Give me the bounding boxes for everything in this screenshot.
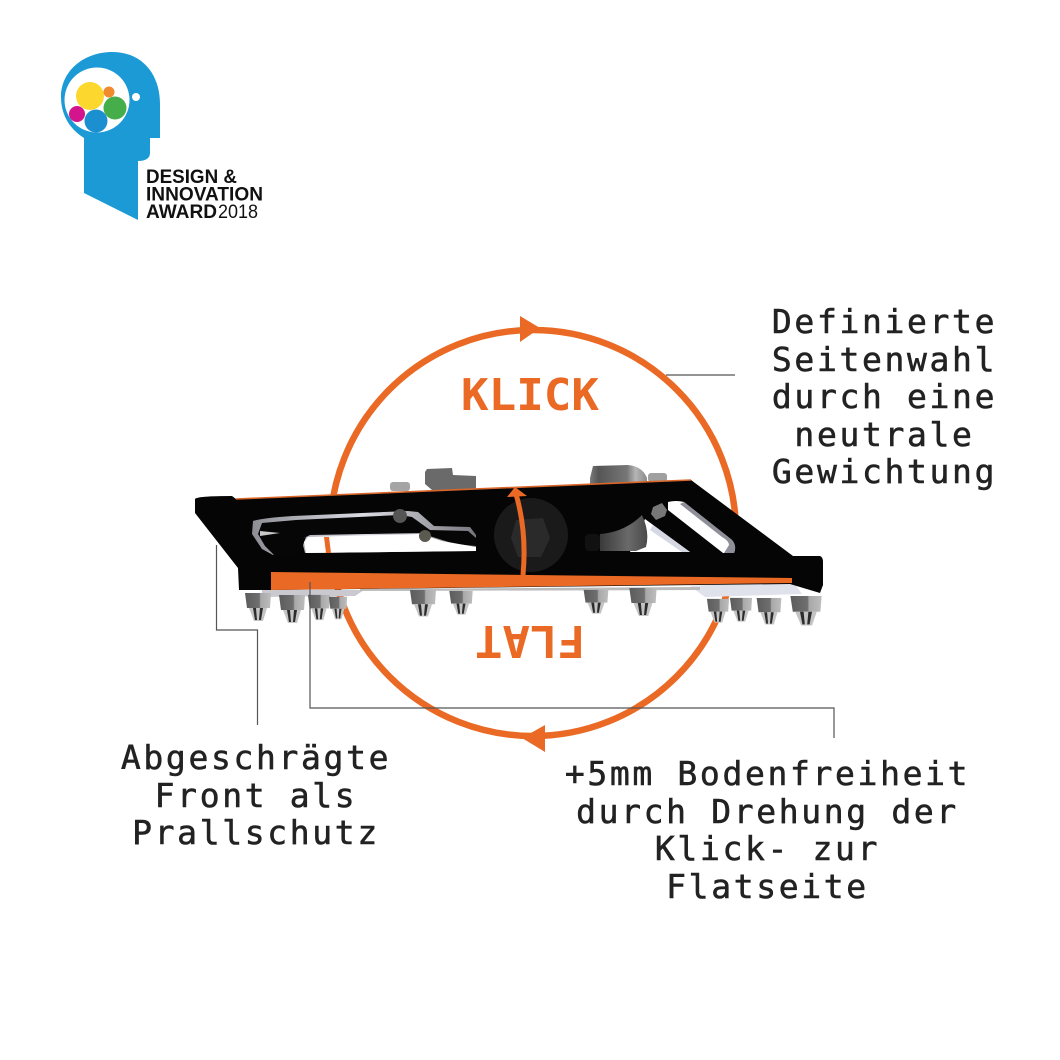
icon: magenta bubble — [69, 106, 85, 122]
leader line: bevelled front — [216, 545, 258, 725]
top screw left — [390, 482, 410, 491]
pedal body — [195, 480, 823, 593]
left window silver frame — [252, 511, 476, 555]
callout: side selection: Gewichtung — [772, 452, 997, 491]
icon: blue head silhouette — [61, 52, 160, 220]
right slot silver edge — [680, 502, 735, 553]
silver underside centre — [360, 587, 700, 591]
arrow: rotation head — [507, 487, 527, 497]
callout: ground clearance: Flatseite — [666, 867, 869, 906]
right slot — [668, 501, 735, 553]
callout: ground clearance: +5mm Bodenfreiheit — [565, 754, 970, 793]
callout: side selection: durch eine — [772, 377, 997, 416]
slot screw upper — [393, 509, 407, 523]
icon: yellow bubble — [76, 82, 104, 110]
arrow: bottom head — [522, 725, 545, 752]
icon: white mind circle — [64, 68, 130, 132]
callout: bevelled front: Prallschutz — [132, 813, 380, 852]
window glint — [260, 531, 280, 536]
top screw right — [648, 473, 667, 482]
silver underside left — [262, 590, 364, 597]
award text: 2018 — [218, 202, 258, 223]
icon: green bubble — [104, 96, 126, 120]
icon: eye — [132, 93, 140, 101]
top hardware: left clip — [425, 468, 476, 490]
orange flat-side bar — [271, 572, 792, 590]
label: FLAT (upside down): FLAT — [475, 615, 585, 666]
axle hex nut — [511, 518, 550, 557]
logo: Design & Innovation Award 2018 — [61, 52, 263, 223]
icon: blue bubble — [84, 110, 108, 132]
rotation circle — [330, 316, 736, 752]
top hardware: right clip — [590, 465, 647, 488]
pins — [245, 588, 822, 625]
icon: orange bubble — [104, 86, 114, 98]
callout: side selection: neutrale — [794, 415, 975, 454]
left window opening — [304, 534, 476, 553]
callout: ground clearance — [565, 754, 970, 906]
pedal — [195, 465, 823, 625]
left window black insert — [258, 515, 476, 556]
slot screw lower — [419, 530, 431, 542]
callout: side selection — [772, 302, 997, 491]
callout: bevelled front — [121, 738, 391, 852]
callout: bevelled front: Abgeschrägte — [121, 738, 391, 777]
award text — [146, 167, 263, 223]
right triangular opening — [630, 519, 690, 552]
callout: side selection: Definierte — [772, 302, 997, 341]
right small black bolt — [585, 534, 600, 551]
right screw — [651, 503, 667, 520]
centre axle disc — [494, 498, 568, 572]
arrow: top clockwise head — [520, 316, 540, 342]
circle seen through window — [324, 537, 331, 553]
callout: ground clearance: Klick- zur — [655, 829, 880, 868]
award text: DESIGN & — [146, 167, 237, 188]
right opening silver edge — [650, 525, 690, 552]
award text: INNOVATION — [146, 184, 263, 206]
leader line: side selection — [666, 374, 735, 376]
label: KLICK: KLICK — [461, 370, 600, 421]
arrow: rotation shaft — [516, 494, 524, 575]
silver underside right — [690, 580, 802, 597]
callout: ground clearance: durch Drehung der — [576, 792, 959, 831]
leader line: ground clearance — [310, 582, 834, 738]
award text: AWARD — [146, 202, 217, 223]
orange top edge line — [236, 480, 691, 499]
callout: bevelled front: Front als — [155, 776, 357, 815]
callout: side selection: Seitenwahl — [772, 340, 997, 379]
right cylinder — [600, 515, 647, 551]
